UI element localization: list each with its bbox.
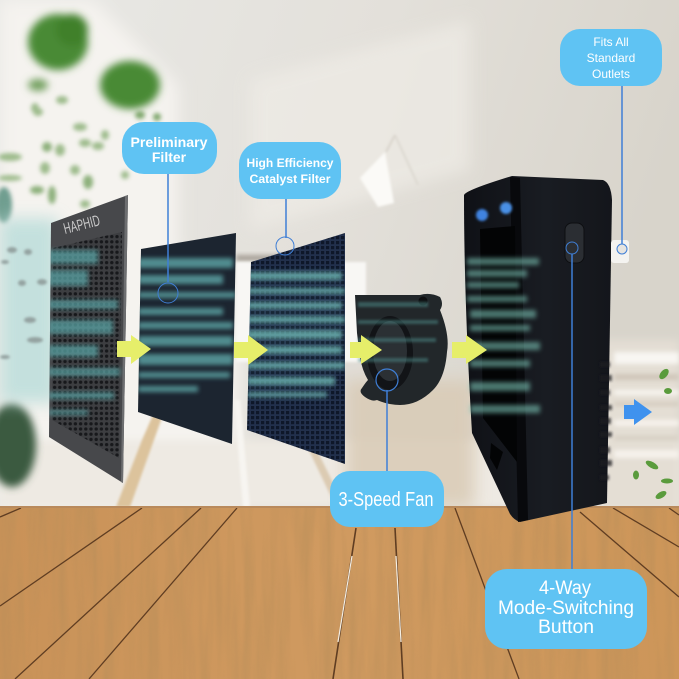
- callout: 3-Speed Fan: 3-Speed Fan: [338, 489, 434, 511]
- arrow: yellow airflow 3: [350, 335, 382, 364]
- power plug: [611, 240, 629, 263]
- wood floor: [0, 506, 679, 679]
- fan: [355, 294, 448, 405]
- filter panel: preliminary filter: [138, 233, 236, 444]
- filter panel: HAPHID front grille: [48, 195, 128, 483]
- callout: Preliminary Filter: [122, 122, 217, 303]
- arrow: yellow airflow 4: [452, 335, 487, 364]
- arrow: yellow airflow 1: [117, 335, 151, 364]
- callout: High Efficiency Catalyst Filter: High Efficiency: [246, 156, 334, 170]
- callout: Fits All Standard Outlets: Outlets: [592, 67, 630, 81]
- callout: 3-Speed Fan: [330, 369, 444, 527]
- decoration: lower-left plant: [0, 403, 36, 487]
- air streaks through purifier: [467, 258, 540, 413]
- decoration: lamp: [360, 135, 418, 207]
- callout: 4-Way Mode-Switching Button: [485, 242, 647, 649]
- brand text: HAPHID: [62, 212, 102, 238]
- arrow: yellow airflow 2: [234, 335, 268, 365]
- callout: Preliminary Filter: Preliminary: [130, 134, 208, 150]
- callout: Fits All Standard Outlets: Fits All: [593, 35, 629, 49]
- incoming air streaks on the left: [0, 218, 58, 403]
- purifier body: [464, 176, 612, 522]
- blue indicator lights: [476, 202, 512, 221]
- callout: 4-Way Mode-Switching Button: 4-Way: [539, 578, 591, 599]
- callout: Preliminary Filter: Filter: [152, 149, 187, 165]
- mode button: [565, 223, 584, 263]
- callout: High Efficiency Catalyst Filter: Catalyst Filter: [250, 172, 331, 186]
- callout: High Efficiency Catalyst Filter: [239, 142, 341, 255]
- leaves: [633, 367, 673, 501]
- callout: Fits All Standard Outlets: [560, 29, 662, 244]
- callout: Fits All Standard Outlets: Standard: [587, 51, 635, 65]
- purifier front opening: [480, 226, 517, 462]
- callout: 4-Way Mode-Switching Button: Mode-Switching: [498, 598, 634, 619]
- background: blurred room wall: [0, 0, 679, 510]
- decoration: hanging plant: [0, 14, 161, 223]
- exhaust fringe: [600, 362, 612, 480]
- callout: 4-Way Mode-Switching Button: Button: [538, 617, 594, 638]
- outgoing clean air: [614, 352, 679, 458]
- arrow: blue outflow: [624, 399, 652, 425]
- filter panel: high efficiency catalyst filter: [247, 233, 345, 464]
